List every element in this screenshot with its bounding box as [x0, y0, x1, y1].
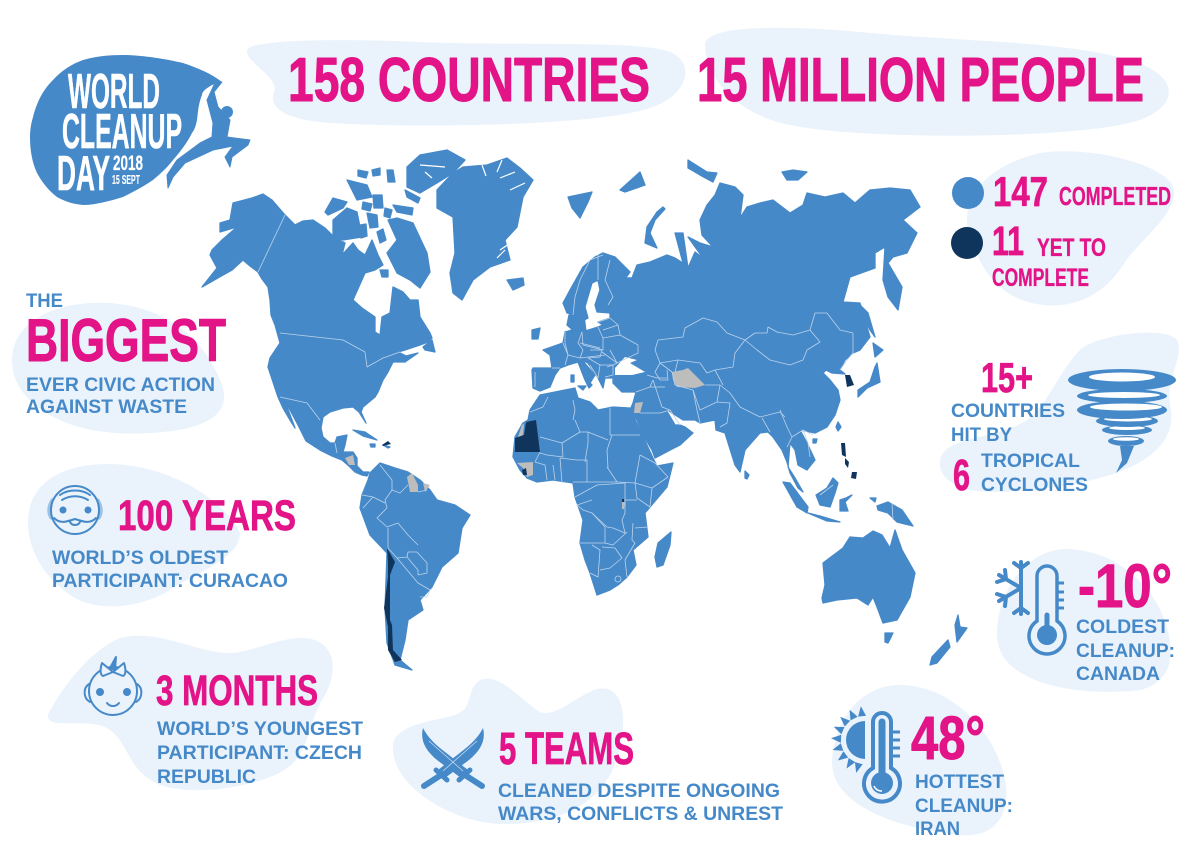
callout: 100 years: [49, 486, 296, 592]
callout: tropical cyclones: [951, 354, 1176, 500]
logo wordmark: WORLD: [68, 65, 160, 119]
callout: coldest: -10°: [1078, 552, 1172, 620]
world map: [202, 150, 967, 670]
legend text: 11 yet to complete: COMPLETE: [992, 264, 1089, 292]
callout: the biggest: BIGGEST: [26, 307, 226, 374]
callout: coldest: CLEANUP:: [1076, 640, 1175, 662]
callout: hottest: [831, 704, 1013, 840]
Iceland: [507, 278, 524, 290]
callout: hottest: IRAN: [915, 818, 960, 840]
heading: 158 countries: 158 COUNTRIES: [288, 46, 650, 115]
Africa: [513, 388, 673, 595]
Eurasia: [532, 183, 920, 492]
callout: 3 months: PARTICIPANT: CZECH: [157, 742, 362, 764]
callout: coldest: CANADA: [1076, 663, 1160, 685]
legend text: 11 yet to complete: YET TO: [1037, 234, 1106, 262]
callout: tropical cyclones: TROPICAL: [981, 450, 1080, 472]
callout: 5 teams: 5 TEAMS: [499, 723, 634, 774]
South America: [360, 463, 470, 670]
callout: the biggest: THE: [26, 290, 63, 312]
callout: 100 years: 100 YEARS: [118, 492, 296, 540]
callout: 100 years: WORLD’S OLDEST: [52, 547, 228, 569]
callout: 3 months: WORLD’S YOUNGEST: [157, 718, 363, 740]
logo wordmark: DAY: [57, 147, 110, 201]
callout: the biggest: AGAINST WASTE: [26, 396, 187, 418]
fjords: [420, 160, 525, 258]
logo wordmark: 15 SEPT: [112, 172, 140, 187]
Greenland: [437, 158, 533, 300]
climber: [167, 82, 250, 188]
icon: crossed swords: [422, 728, 484, 786]
callout: hottest: 48°: [911, 704, 985, 772]
logo wordmark: 2018: [113, 152, 143, 175]
North America: [202, 194, 432, 476]
callout: 3 months: REPUBLIC: [157, 766, 256, 788]
callout: the biggest: EVER CIVIC ACTION: [26, 374, 215, 396]
callout: tropical cyclones: COUNTRIES: [951, 400, 1065, 422]
logo wordmark: [57, 65, 182, 201]
legend text: 11 yet to complete: 11: [992, 218, 1024, 264]
icon: snowflake and thermometer: [997, 562, 1065, 654]
callout: hottest: HOTTEST: [915, 771, 1004, 793]
icon: baby face: [85, 657, 141, 715]
callout: tropical cyclones: HIT BY: [951, 424, 1012, 446]
Black Sea: [615, 357, 645, 375]
icon: tornado: [1068, 369, 1176, 473]
logo: World Cleanup Day 2018: [30, 55, 250, 205]
callout: the biggest: [26, 290, 226, 418]
legend: [951, 168, 1171, 292]
icon: old person face: [49, 486, 101, 534]
country borders: [258, 215, 893, 597]
callout: 3 months: 3 MONTHS: [156, 667, 318, 715]
Islands: [353, 160, 967, 665]
callout: 100 years: PARTICIPANT: CURACAO: [52, 570, 288, 592]
legend text: 147 completed: [993, 168, 1171, 215]
callout: tropical cyclones: 6: [953, 451, 970, 500]
callout: tropical cyclones: CYCLONES: [981, 474, 1088, 496]
callout: 5 teams: WARS, CONFLICTS & UNREST: [498, 803, 783, 825]
callout: coldest: COLDEST: [1076, 616, 1169, 638]
legend text: 11 yet to complete: [992, 218, 1106, 292]
callout: hottest: CLEANUP:: [915, 795, 1013, 817]
icon: sun and thermometer: [831, 706, 900, 802]
dark and grey countries: [345, 368, 857, 662]
legend dot: yet to complete: [951, 227, 983, 259]
legend dot: completed: [952, 177, 984, 209]
callout: tropical cyclones: 15+: [981, 354, 1033, 401]
callout: coldest: [997, 552, 1175, 685]
Arctic islands: [325, 150, 465, 352]
callout: 5 teams: CLEANED DESPITE ONGOING: [498, 780, 780, 802]
legend text: 147 completed: 147: [993, 168, 1048, 215]
callout: 3 months: [85, 657, 363, 788]
callout: 5 teams: [422, 723, 783, 825]
logo wordmark: CLEANUP: [62, 105, 182, 159]
